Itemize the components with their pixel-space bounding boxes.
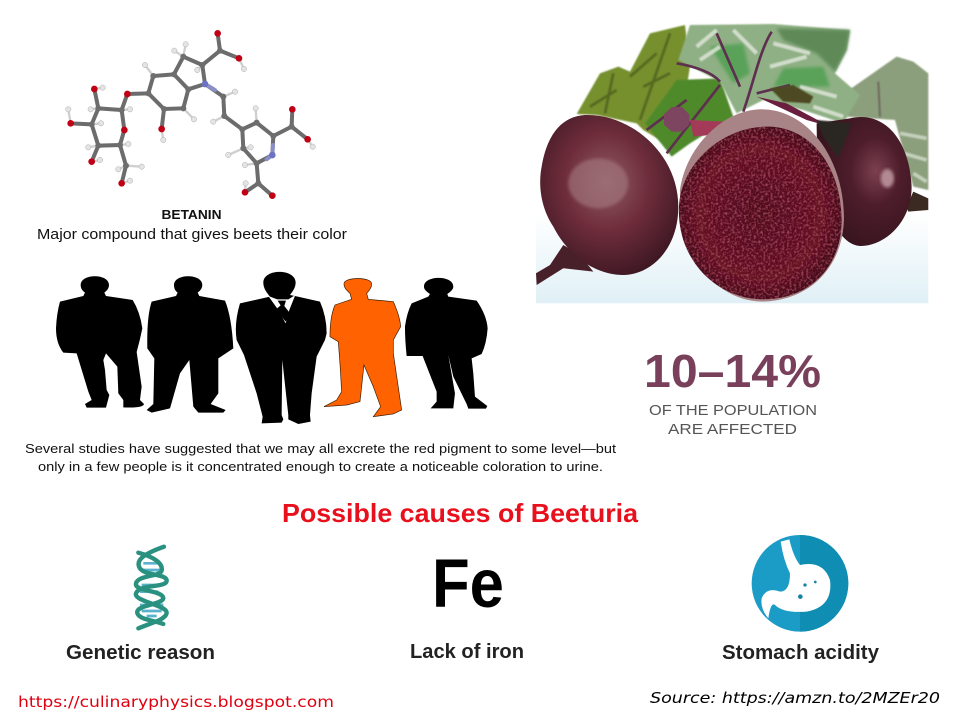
left leaves bbox=[577, 25, 690, 150]
back right leaf bbox=[847, 57, 928, 190]
left beet bbox=[536, 115, 678, 285]
label: lack of iron: Lack of iron bbox=[410, 641, 524, 663]
green leaf patches bbox=[710, 43, 830, 87]
label: stomach acidity: Stomach acidity bbox=[722, 642, 880, 664]
photo: beets bbox=[536, 23, 928, 303]
source credit: Source: https://amzn.to/2MZEr20 bbox=[650, 689, 940, 707]
person 5 bbox=[405, 278, 488, 409]
molecule: betanin bbox=[66, 30, 315, 199]
stem bbox=[690, 120, 723, 137]
paragraph about pigment bbox=[25, 441, 616, 474]
stat: 10–14%: 10–14% bbox=[644, 345, 821, 397]
paragraph about pigment: Several studies have suggested that we may all excrete the red pigment to some level—but bbox=[25, 441, 616, 456]
person 1 bbox=[56, 276, 144, 408]
icon: DNA helix bbox=[136, 547, 167, 628]
stat caption line 1: OF THE POPULATION bbox=[649, 402, 817, 419]
paragraph about pigment: only in a few people is it concentrated enough to create a noticeable coloration to urine. bbox=[38, 459, 603, 474]
lower dark leaf bbox=[645, 78, 733, 157]
icon: stomach bbox=[752, 535, 848, 632]
right beet bbox=[817, 117, 928, 246]
people silhouettes bbox=[56, 272, 488, 424]
heading: possible causes: Possible causes of Beeturia bbox=[282, 498, 639, 528]
main pale leaf bbox=[678, 24, 860, 123]
compound name: BETANIN bbox=[162, 208, 222, 222]
person 3 bbox=[236, 272, 327, 424]
leaf highlights bbox=[697, 30, 843, 117]
label: genetic reason: Genetic reason bbox=[66, 642, 215, 664]
website link text: https://culinaryphysics.blogspot.com bbox=[18, 693, 334, 711]
cut beet bbox=[679, 109, 844, 302]
person 4 bbox=[324, 278, 402, 417]
person 2 bbox=[147, 276, 233, 413]
icon: Fe: Fe bbox=[432, 545, 504, 622]
compound caption: Major compound that gives beets their color bbox=[37, 226, 347, 243]
stem dot bbox=[664, 107, 689, 132]
leaf veins bbox=[647, 32, 790, 153]
stat caption line 2: ARE AFFECTED bbox=[668, 421, 797, 438]
dark leaf fold bbox=[770, 85, 813, 103]
left leaf shading bbox=[590, 33, 670, 120]
tie bbox=[276, 301, 291, 322]
dark upper leaf patch bbox=[777, 28, 850, 72]
back leaf stripes bbox=[878, 82, 927, 182]
shirt bbox=[268, 295, 295, 323]
